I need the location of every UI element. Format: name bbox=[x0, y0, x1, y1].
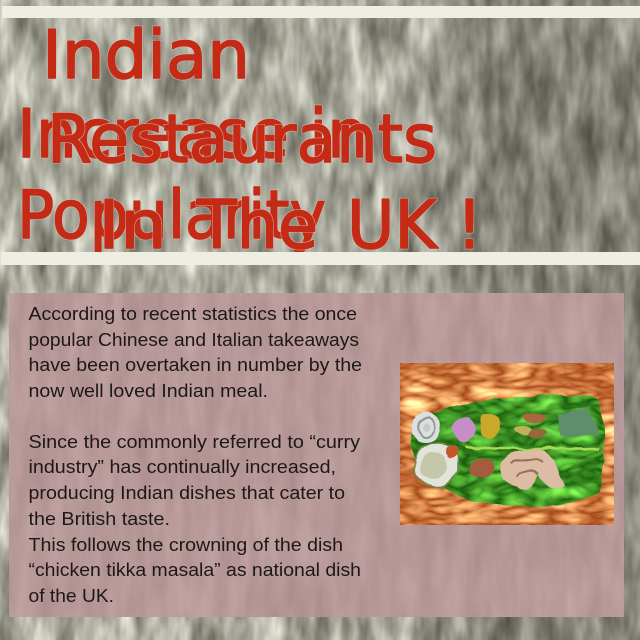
title layer: Restaurants, In The UK ! bbox=[47, 100, 483, 264]
top cream bar bbox=[2, 6, 640, 18]
title layer: Indian, Increase in, Popularity bbox=[17, 16, 368, 254]
article text bbox=[28, 303, 362, 606]
article text: producing Indian dishes that cater to bbox=[28, 482, 345, 503]
orange textured backdrop bbox=[400, 363, 614, 525]
title layer: Indian, Increase in, Popularity: Popularity bbox=[17, 176, 326, 254]
icon: centre food mound bbox=[469, 448, 564, 491]
food image: thali on banana leaf bbox=[400, 363, 614, 525]
title layer: Restaurants, In The UK !: ! bbox=[456, 186, 483, 264]
title layer: Restaurants, In The UK !: In bbox=[98, 186, 167, 264]
title layer: Restaurants, In The UK !: UK bbox=[347, 186, 439, 264]
bottom cream bar bbox=[1, 252, 640, 265]
panel: article bbox=[9, 293, 624, 617]
title layer: Restaurants, In The UK !: Restaurants bbox=[47, 100, 437, 178]
article text: industry” has continually increased, bbox=[28, 456, 336, 477]
title layer: Indian, Increase in, Popularity: Increase in bbox=[17, 95, 368, 173]
icon: yellow dish bbox=[479, 413, 501, 439]
article text: now well loved Indian meal. bbox=[28, 380, 268, 401]
article text: the British taste. bbox=[28, 508, 170, 529]
title: overlapping text layers bbox=[17, 16, 483, 264]
title layer: Restaurants, In The UK !: The bbox=[196, 186, 318, 264]
icon: white plate with rice bbox=[415, 443, 459, 487]
title layer: Indian, Increase in, Popularity: Indian bbox=[42, 16, 250, 94]
article text: popular Chinese and Italian takeaways bbox=[28, 329, 359, 350]
icon: grey-green dish bbox=[558, 408, 598, 436]
icon: purple dish bbox=[454, 417, 474, 443]
article text: This follows the crowning of the dish bbox=[28, 534, 343, 555]
icon: brown dish bbox=[513, 412, 547, 438]
article text: have been overtaken in number by the bbox=[28, 354, 362, 375]
icon: white bowl bbox=[411, 413, 441, 443]
article text: of the UK. bbox=[28, 585, 114, 606]
banana leaf bbox=[405, 390, 610, 510]
article text: According to recent statistics the once bbox=[28, 303, 357, 324]
article text: Since the commonly referred to “curry bbox=[28, 431, 361, 452]
article text: “chicken tikka masala” as national dish bbox=[28, 559, 361, 580]
